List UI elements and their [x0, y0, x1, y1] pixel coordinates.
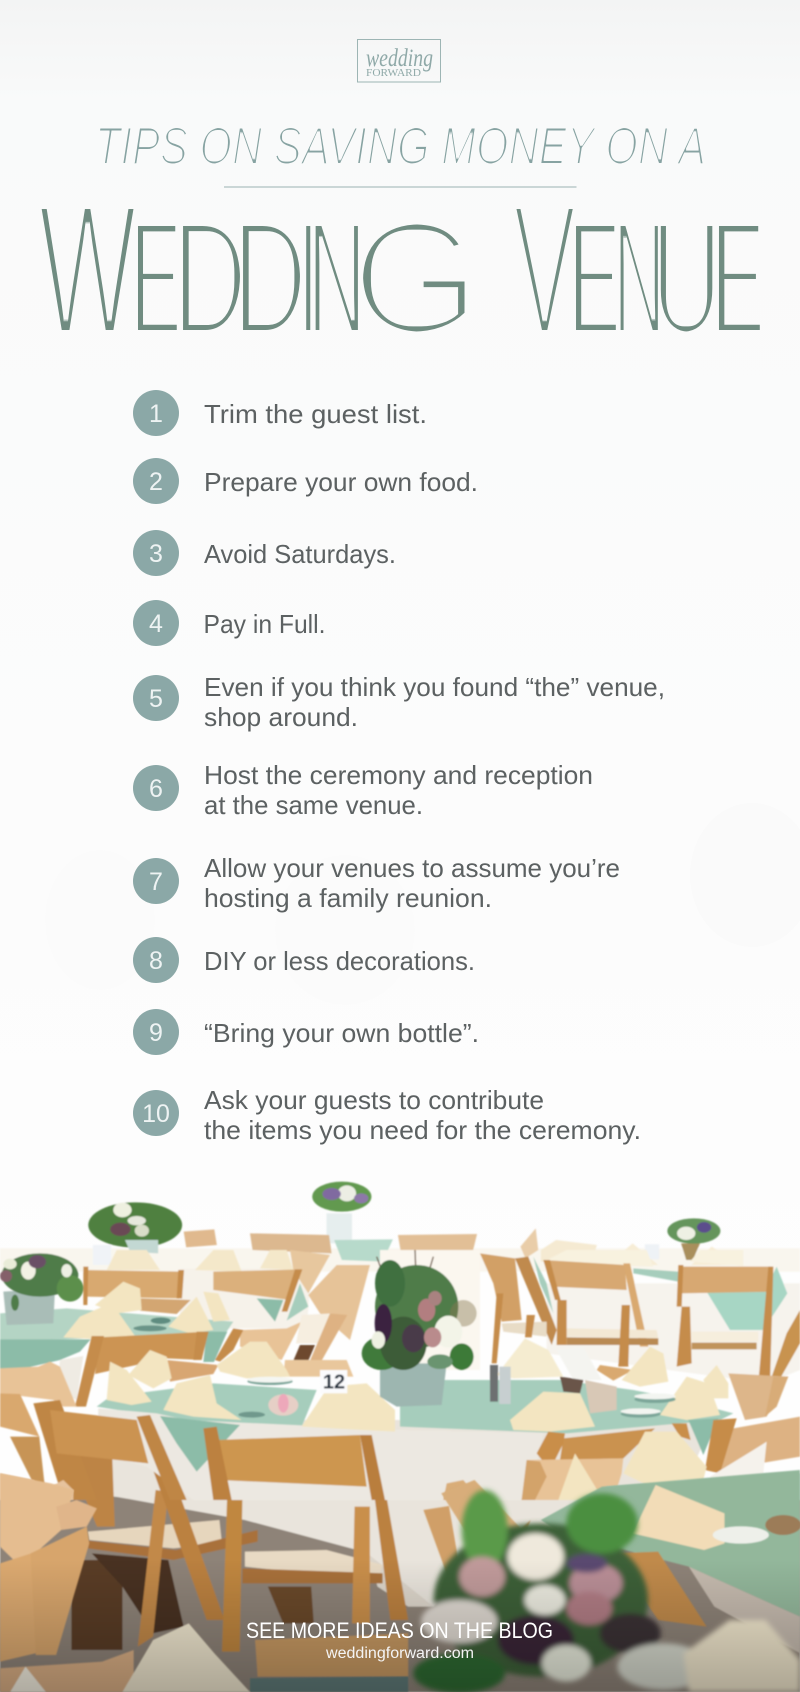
- main title: E: [131, 187, 181, 368]
- tip 10: 10: [142, 1100, 170, 1128]
- main title: I: [298, 187, 319, 368]
- tip 1: [133, 390, 427, 436]
- tip 7: [133, 853, 620, 913]
- tip 3: [133, 530, 396, 576]
- tip 7: Allow your venues to assume you’re: [204, 853, 620, 883]
- footer call to action: SEE MORE IDEAS ON THE BLOG: [246, 1618, 553, 1643]
- main title: W: [38, 165, 137, 373]
- logo: wedding: [366, 45, 433, 72]
- main title: G: [351, 187, 481, 368]
- tip 2: 2: [149, 468, 163, 496]
- main title: E: [712, 187, 764, 368]
- tip 10: [133, 1085, 641, 1145]
- tip 6: 6: [149, 775, 163, 803]
- tip 4: 4: [149, 610, 163, 638]
- main title: [38, 165, 764, 374]
- photo: reception tables and chairs: [0, 1182, 800, 1692]
- tip 5: shop around.: [204, 702, 358, 732]
- tip 4: [133, 600, 326, 646]
- main title: V: [513, 166, 577, 374]
- main title: E: [569, 188, 620, 368]
- footer call to action: weddingforward.com: [325, 1645, 474, 1662]
- far tables and bouquets: [0, 1182, 800, 1272]
- floor, cloth and lower chairs: [0, 1420, 800, 1692]
- main title: U: [651, 188, 722, 369]
- tips list: [133, 390, 665, 1145]
- middle left: tables, napkins, chairs: [0, 1250, 400, 1500]
- footer call to action: [246, 1618, 553, 1662]
- middle right: tables, napkins, chairs: [380, 1250, 800, 1500]
- main title: N: [308, 188, 366, 369]
- tip 8: 8: [149, 947, 163, 975]
- tip 1: 1: [149, 400, 163, 428]
- tip 6: Host the ceremony and reception: [204, 760, 593, 790]
- logo: [358, 40, 440, 82]
- tip 7: 7: [149, 868, 163, 896]
- tip 7: hosting a family reunion.: [204, 883, 492, 913]
- tip 10: the items you need for the ceremony.: [204, 1115, 641, 1145]
- main title: D: [233, 187, 307, 368]
- tip 4: Pay in Full.: [204, 609, 326, 639]
- tip 9: 9: [149, 1019, 163, 1047]
- main title: N: [613, 189, 665, 368]
- tip 5: 5: [149, 685, 163, 713]
- logo: FORWARD: [366, 68, 421, 79]
- tip 6: [133, 760, 593, 820]
- centre bouquet: [362, 1250, 477, 1407]
- tip 2: [133, 458, 478, 504]
- tip 9: “Bring your own bottle”.: [204, 1018, 479, 1048]
- tip 8: [133, 937, 475, 983]
- tip 8: DIY or less decorations.: [204, 946, 475, 976]
- tip 3: Avoid Saturdays.: [204, 539, 396, 569]
- title rule: [224, 186, 576, 188]
- tip 10: Ask your guests to contribute: [204, 1085, 544, 1115]
- tip 3: 3: [149, 540, 163, 568]
- tip 1: Trim the guest list.: [204, 399, 427, 429]
- foreground blurred flowers and chairs: [0, 1470, 800, 1692]
- tip 5: [133, 672, 665, 732]
- tip 5: Even if you think you found “the” venue,: [204, 672, 665, 702]
- middle left: tables, napkins, chairs: 12: [323, 1371, 345, 1393]
- main title: D: [173, 187, 247, 368]
- tip 2: Prepare your own food.: [204, 467, 478, 497]
- tip 9: [133, 1009, 479, 1055]
- tip 6: at the same venue.: [204, 790, 423, 820]
